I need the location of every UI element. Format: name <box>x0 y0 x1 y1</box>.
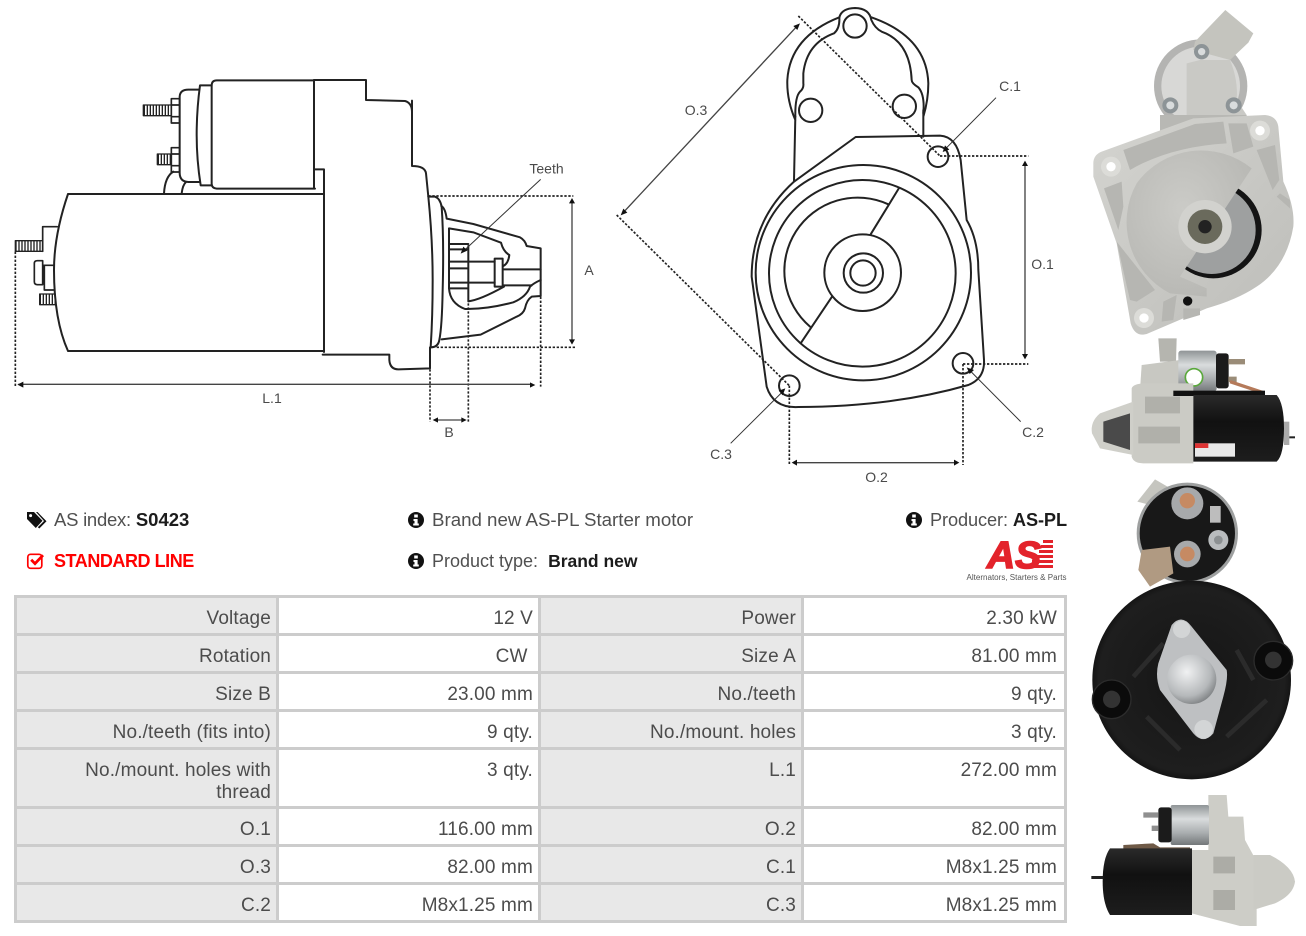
mounting holes <box>928 146 948 167</box>
row: teeth fits into, mounting holes: 3 qty. <box>1011 722 1057 743</box>
front-view labels: O.1 <box>1031 256 1054 272</box>
front-view technical drawing <box>617 8 1028 466</box>
AS-PL logo <box>966 535 1066 582</box>
row: O.1, O.2: 82.00 mm <box>971 819 1057 840</box>
row: voltage, power: 2.30 kW <box>986 608 1057 629</box>
row: rotation, size A: CW <box>496 646 528 667</box>
row: threaded holes, L.1: 3 qty. <box>487 760 533 781</box>
row: threaded holes, L.1: L.1 <box>769 760 796 781</box>
icon: tags <box>27 512 46 528</box>
row: teeth fits into, mounting holes: No./teeth (fits into) <box>113 722 271 743</box>
front-view labels: O.2 <box>865 469 888 485</box>
front-view labels: O.3 <box>685 102 707 118</box>
row: teeth fits into, mounting holes <box>17 712 1057 747</box>
standard line badge: STANDARD LINE <box>54 551 194 571</box>
row: size B, teeth: 9 qty. <box>1011 684 1057 705</box>
row: O.3, C.1: 82.00 mm <box>447 857 533 878</box>
rear stud and terminal <box>15 227 57 305</box>
row: size B, teeth: 23.00 mm <box>447 684 533 705</box>
row: O.1, O.2 <box>17 809 1057 844</box>
row: O.1, O.2: O.2 <box>765 819 796 840</box>
front-view labels <box>685 78 1054 485</box>
row: rotation, size A: Size A <box>741 646 796 667</box>
side-view labels: Teeth <box>529 160 564 176</box>
icon: info 2 <box>408 553 424 569</box>
icon: info 1 <box>408 512 424 528</box>
leader lines: C.1, C.2, C.3 <box>731 98 1021 443</box>
row: C.2, C.3: C.2 <box>241 895 271 916</box>
icon: info 3 <box>906 512 922 528</box>
specification table <box>14 595 1067 923</box>
photo: starter rear view <box>1092 479 1293 779</box>
row: O.3, C.1: C.1 <box>766 857 796 878</box>
row: size B, teeth: Size B <box>215 684 271 705</box>
row: size B, teeth: No./teeth <box>718 684 796 705</box>
side-view labels: B <box>444 424 454 440</box>
row: teeth fits into, mounting holes: 9 qty. <box>487 722 533 743</box>
dimension lines: O.1, O.2, O.3 <box>617 16 1028 465</box>
AS index: AS index: S0423 <box>54 509 189 530</box>
row: threaded holes, L.1 <box>17 750 1057 806</box>
row: O.1, O.2: 116.00 mm <box>438 819 533 840</box>
mounting flange outline <box>752 136 984 407</box>
side-view labels <box>262 160 594 440</box>
row: O.1, O.2: O.1 <box>240 819 271 840</box>
product type: Product type: Brand new <box>432 551 638 571</box>
description: Brand new AS-PL Starter motor <box>432 509 693 530</box>
row: O.3, C.1 <box>17 847 1057 882</box>
solenoid outline behind flange <box>787 17 928 181</box>
row: rotation, size A: Rotation <box>199 646 271 667</box>
icon: checked box <box>28 554 43 568</box>
front flange, nose and pinion <box>428 197 541 347</box>
side-view labels: L.1 <box>262 390 282 406</box>
front-view labels: C.1 <box>999 78 1021 94</box>
row: voltage, power: Power <box>741 608 796 629</box>
row: threaded holes, L.1: No./mount. holes with <box>85 760 271 781</box>
row: voltage, power: 12 V <box>493 608 533 629</box>
side-view technical drawing <box>15 80 594 440</box>
row: rotation, size A: 81.00 mm <box>971 646 1057 667</box>
row: size B, teeth <box>17 674 1057 709</box>
dimension lines: A, B, L.1 <box>18 179 575 423</box>
row: C.2, C.3: M8x1.25 mm <box>946 895 1057 916</box>
solenoid and rear terminals <box>143 80 315 193</box>
row: O.3, C.1: M8x1.25 mm <box>946 857 1057 878</box>
nose rings <box>756 165 971 380</box>
motor housing outline <box>314 80 430 369</box>
front-view labels: C.2 <box>1022 424 1044 440</box>
photo: starter opposite side view <box>1091 795 1295 926</box>
photo: starter side view with label <box>1092 338 1295 463</box>
row: teeth fits into, mounting holes: No./mount. holes <box>650 722 796 743</box>
photo: starter front view <box>1093 10 1294 335</box>
row: C.2, C.3 <box>17 885 1057 920</box>
row: voltage, power: Voltage <box>207 608 271 629</box>
row: rotation, size A <box>17 636 1057 671</box>
row: threaded holes, L.1: thread <box>216 782 271 803</box>
AS-PL logo: AS <box>986 535 1041 577</box>
row: threaded holes, L.1: 272.00 mm <box>961 760 1057 781</box>
front-view labels: C.3 <box>710 446 732 462</box>
producer: Producer: AS-PL <box>930 510 1067 530</box>
side-view labels: A <box>584 262 594 278</box>
row: C.2, C.3: C.3 <box>766 895 796 916</box>
row: voltage, power <box>17 598 1057 920</box>
row: C.2, C.3: M8x1.25 mm <box>422 895 533 916</box>
row: O.3, C.1: O.3 <box>240 857 271 878</box>
AS-PL logo: Alternators, Starters & Parts <box>966 573 1066 582</box>
